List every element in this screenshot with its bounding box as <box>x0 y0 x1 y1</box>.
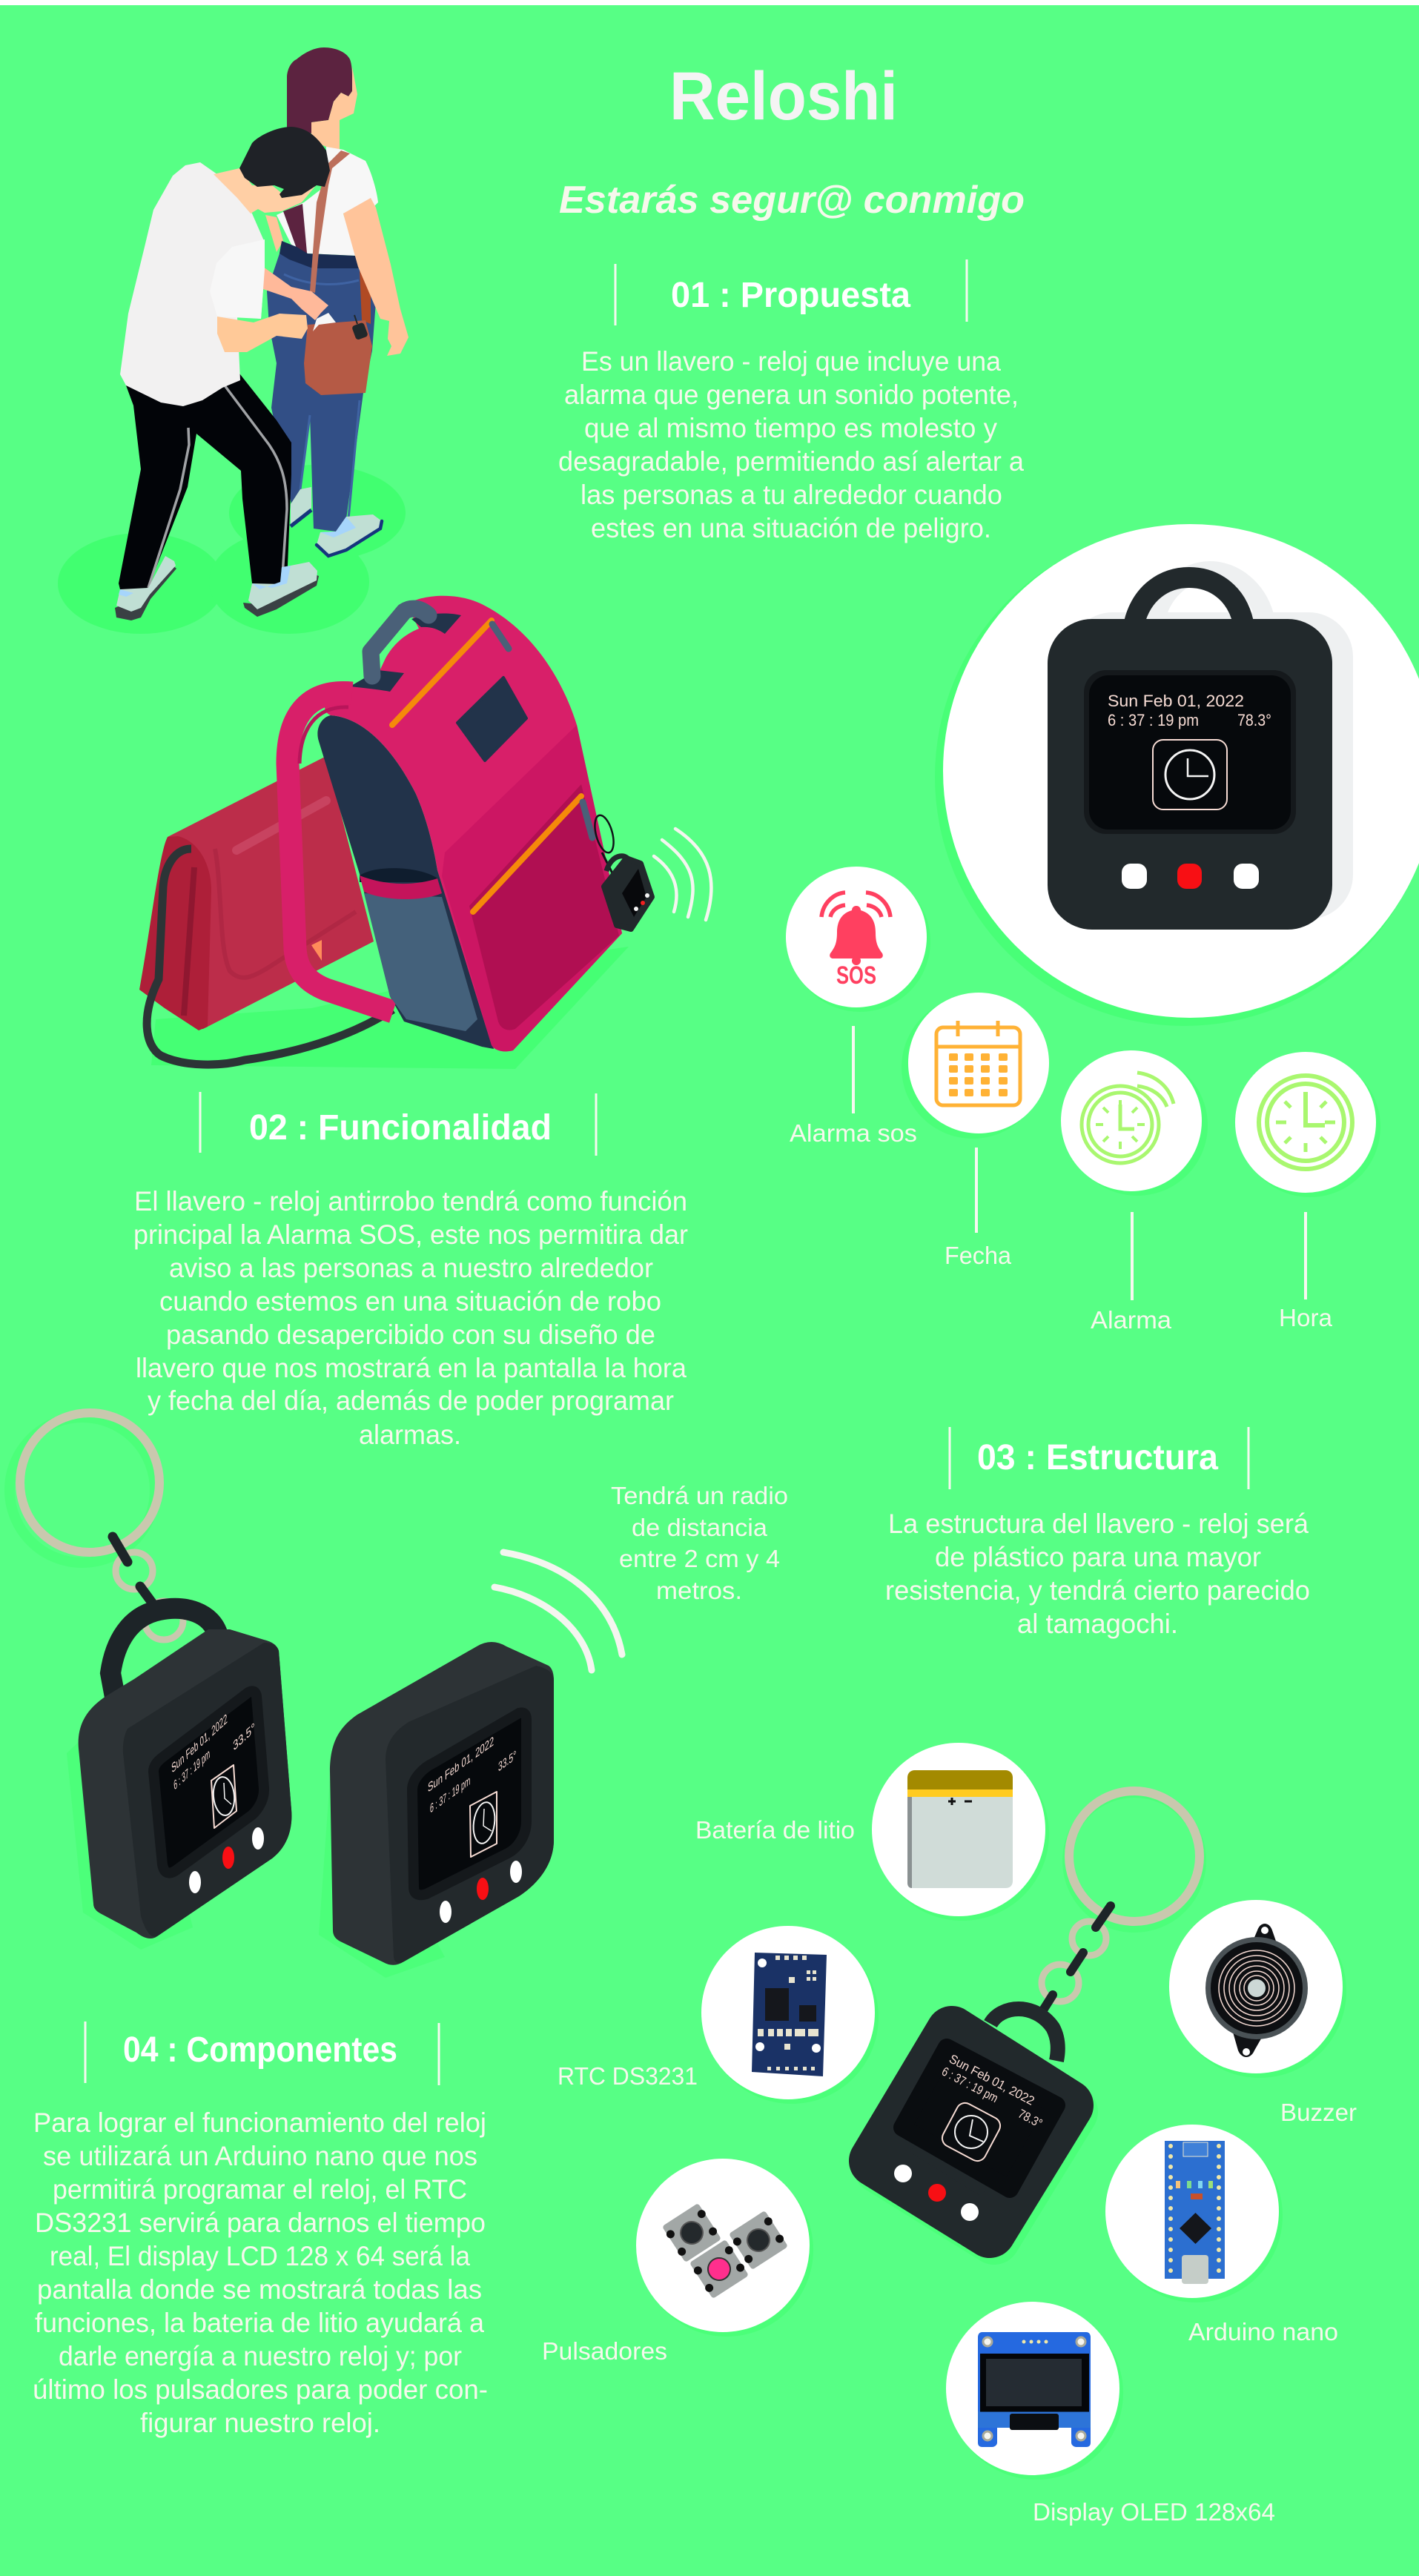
body shadow <box>319 1779 445 1978</box>
component labels: Buzzer <box>1280 2099 1357 2126</box>
text block: componentes <box>33 2108 488 2438</box>
text block: estructura: al tamagochi. <box>1017 1609 1178 1639</box>
text block: funcionalidad: y fecha del día, además de poder programar <box>148 1385 674 1416</box>
back shoe <box>291 487 311 525</box>
text block: funcionalidad: aviso a las personas a nuestro alrededor <box>169 1253 653 1283</box>
keychain illustration: front with ring <box>10 1413 291 1950</box>
component: rtc <box>701 1926 879 2104</box>
key ring <box>10 1413 183 1640</box>
keychain illustration: isometric body: 33.5° <box>498 1747 516 1775</box>
text block: funcionalidad: El llavero - reloj antirrobo tendrá como función <box>134 1186 687 1216</box>
component: arduino <box>1105 2125 1283 2302</box>
text block: propuesta: alarma que genera un sonido potente, <box>564 380 1019 410</box>
device front <box>1048 577 1332 930</box>
keychain illustration: isometric body: Sun Feb 01, 2022 <box>428 1734 494 1795</box>
strap loop <box>288 692 393 1012</box>
text block: componentes: funciones, la bateria de litio ayudará a <box>35 2308 484 2338</box>
panel: big device circle <box>935 524 1419 1026</box>
device shadow <box>1068 571 1353 919</box>
text block: componentes: se utilizará un Arduino nano que nos <box>43 2141 477 2171</box>
heading: 04 Componentes: 04 : Componentes <box>123 2030 397 2070</box>
heading: 02 Funcionalidad: 02 : Funcionalidad <box>249 1108 552 1148</box>
feature labels <box>790 1026 1333 1334</box>
text block: funcionalidad: pasando desapercibido con su diseño de <box>166 1320 655 1350</box>
front shoe <box>317 514 382 556</box>
component: pulsadores <box>636 2159 813 2337</box>
keychain illustration: isometric body <box>319 1642 554 1978</box>
text block: componentes: permitirá programar el reloj, el RTC <box>53 2174 467 2205</box>
text block: estructura: resistencia, y tendrá cierto parecido <box>885 1575 1310 1606</box>
illustration: couple with thief <box>58 47 408 634</box>
keychain illustration: front with ring: 33.5° <box>232 1720 256 1754</box>
woman <box>265 47 408 556</box>
handbag <box>139 756 374 1030</box>
icon: hora <box>1235 1052 1380 1197</box>
icon: alarma sos: SOS <box>836 961 876 990</box>
feature labels: Alarma <box>1091 1306 1172 1334</box>
text block: componentes: último los pulsadores para poder con- <box>33 2374 488 2405</box>
text block: componentes: darle energía a nuestro reloj y; por <box>59 2341 462 2371</box>
signal arcs <box>494 1552 622 1670</box>
component labels <box>542 1816 1357 2526</box>
text block: propuesta: que al mismo tiempo es molesto y <box>584 413 997 443</box>
text block: propuesta: desagradable, permitiendo así alertar a <box>558 446 1024 477</box>
text block: radio de distancia: de distancia <box>632 1514 768 1541</box>
heading: 03 Estructura: 03 : Estructura <box>977 1438 1218 1477</box>
text block: estructura: de plástico para una mayor <box>935 1542 1261 1572</box>
feature labels: Alarma sos <box>790 1119 917 1147</box>
text block: propuesta <box>558 346 1024 543</box>
feature labels: Fecha <box>945 1242 1012 1269</box>
side panel <box>317 715 494 1049</box>
title: Reloshi <box>669 59 898 134</box>
subtitle: Estarás segur@ conmigo <box>559 179 1025 222</box>
text block: funcionalidad: cuando estemos en una situación de robo <box>159 1286 661 1317</box>
shoulder bag <box>304 320 372 395</box>
illustration: backpack and handbag with keychain <box>139 596 711 1069</box>
component labels: Display OLED 128x64 <box>1033 2498 1275 2526</box>
device front: Sun Feb 01, 2022 <box>1108 692 1244 710</box>
text block: estructura <box>885 1509 1310 1639</box>
component labels: Batería de litio <box>695 1816 855 1844</box>
heading: 01 Propuesta: 01 : Propuesta <box>671 276 910 315</box>
text block: radio de distancia: metros. <box>656 1577 742 1604</box>
sound waves <box>654 856 677 912</box>
text block: propuesta: las personas a tu alrededor cuando <box>580 480 1002 510</box>
central keychain device: 78.3° <box>1016 2107 1045 2130</box>
component: bateria <box>872 1743 1049 1921</box>
text block: radio de distancia: entre 2 cm y 4 <box>619 1545 780 1572</box>
text block: propuesta: Es un llavero - reloj que incluye una <box>581 346 1001 377</box>
text block: funcionalidad <box>133 1186 688 1450</box>
text block: funcionalidad: llavero que nos mostrará en la pantalla la hora <box>136 1353 687 1383</box>
bottle pocket <box>364 893 477 1031</box>
text block: radio de distancia: Tendrá un radio <box>611 1482 788 1509</box>
feature labels: Hora <box>1279 1304 1333 1331</box>
component labels: Pulsadores <box>542 2337 667 2365</box>
man <box>115 127 330 620</box>
device front: 6 : 37 : 19 pm <box>1108 711 1199 729</box>
text block: componentes: DS3231 servirá para darnos el tiempo <box>35 2208 486 2238</box>
text block: componentes: Para lograr el funcionamiento del reloj <box>33 2108 486 2138</box>
icon: alarma <box>1061 1050 1208 1196</box>
device front: 78.3° <box>1237 711 1271 729</box>
central keychain device: Sun Feb 01, 2022 <box>947 2052 1036 2108</box>
component labels: RTC DS3231 <box>558 2062 698 2090</box>
text block: funcionalidad: alarmas. <box>359 1420 461 1450</box>
icon: fecha <box>902 993 1049 1139</box>
keychain illustration: front with ring: 6 : 37 : 19 pm <box>173 1746 211 1793</box>
text block: radio de distancia <box>611 1482 788 1604</box>
text block: componentes: real, El display LCD 128 x 64 será la <box>50 2241 470 2271</box>
central keychain device: 6 : 37 : 19 pm <box>939 2065 1000 2105</box>
component: buzzer <box>1169 1900 1346 2078</box>
icon: alarma sos <box>786 867 930 1012</box>
body <box>325 596 622 1051</box>
keychain illustration: front with ring: Sun Feb 01, 2022 <box>171 1711 228 1776</box>
text block: componentes: figurar nuestro reloj. <box>140 2408 380 2438</box>
component: display oled <box>946 2302 1123 2480</box>
text block: funcionalidad: principal la Alarma SOS, este nos permitira dar <box>133 1219 688 1250</box>
keychain on backpack <box>592 813 652 929</box>
component labels: Arduino nano <box>1188 2318 1338 2345</box>
text block: componentes: pantalla donde se mostrará todas las <box>37 2274 482 2305</box>
central keychain device <box>875 1791 1202 2239</box>
body shadow <box>67 1690 193 1950</box>
keychain illustration: isometric body: 6 : 37 : 19 pm <box>430 1773 470 1816</box>
text block: estructura: La estructura del llavero - reloj será <box>888 1509 1309 1539</box>
text block: propuesta: estes en una situación de peligro. <box>591 513 991 543</box>
